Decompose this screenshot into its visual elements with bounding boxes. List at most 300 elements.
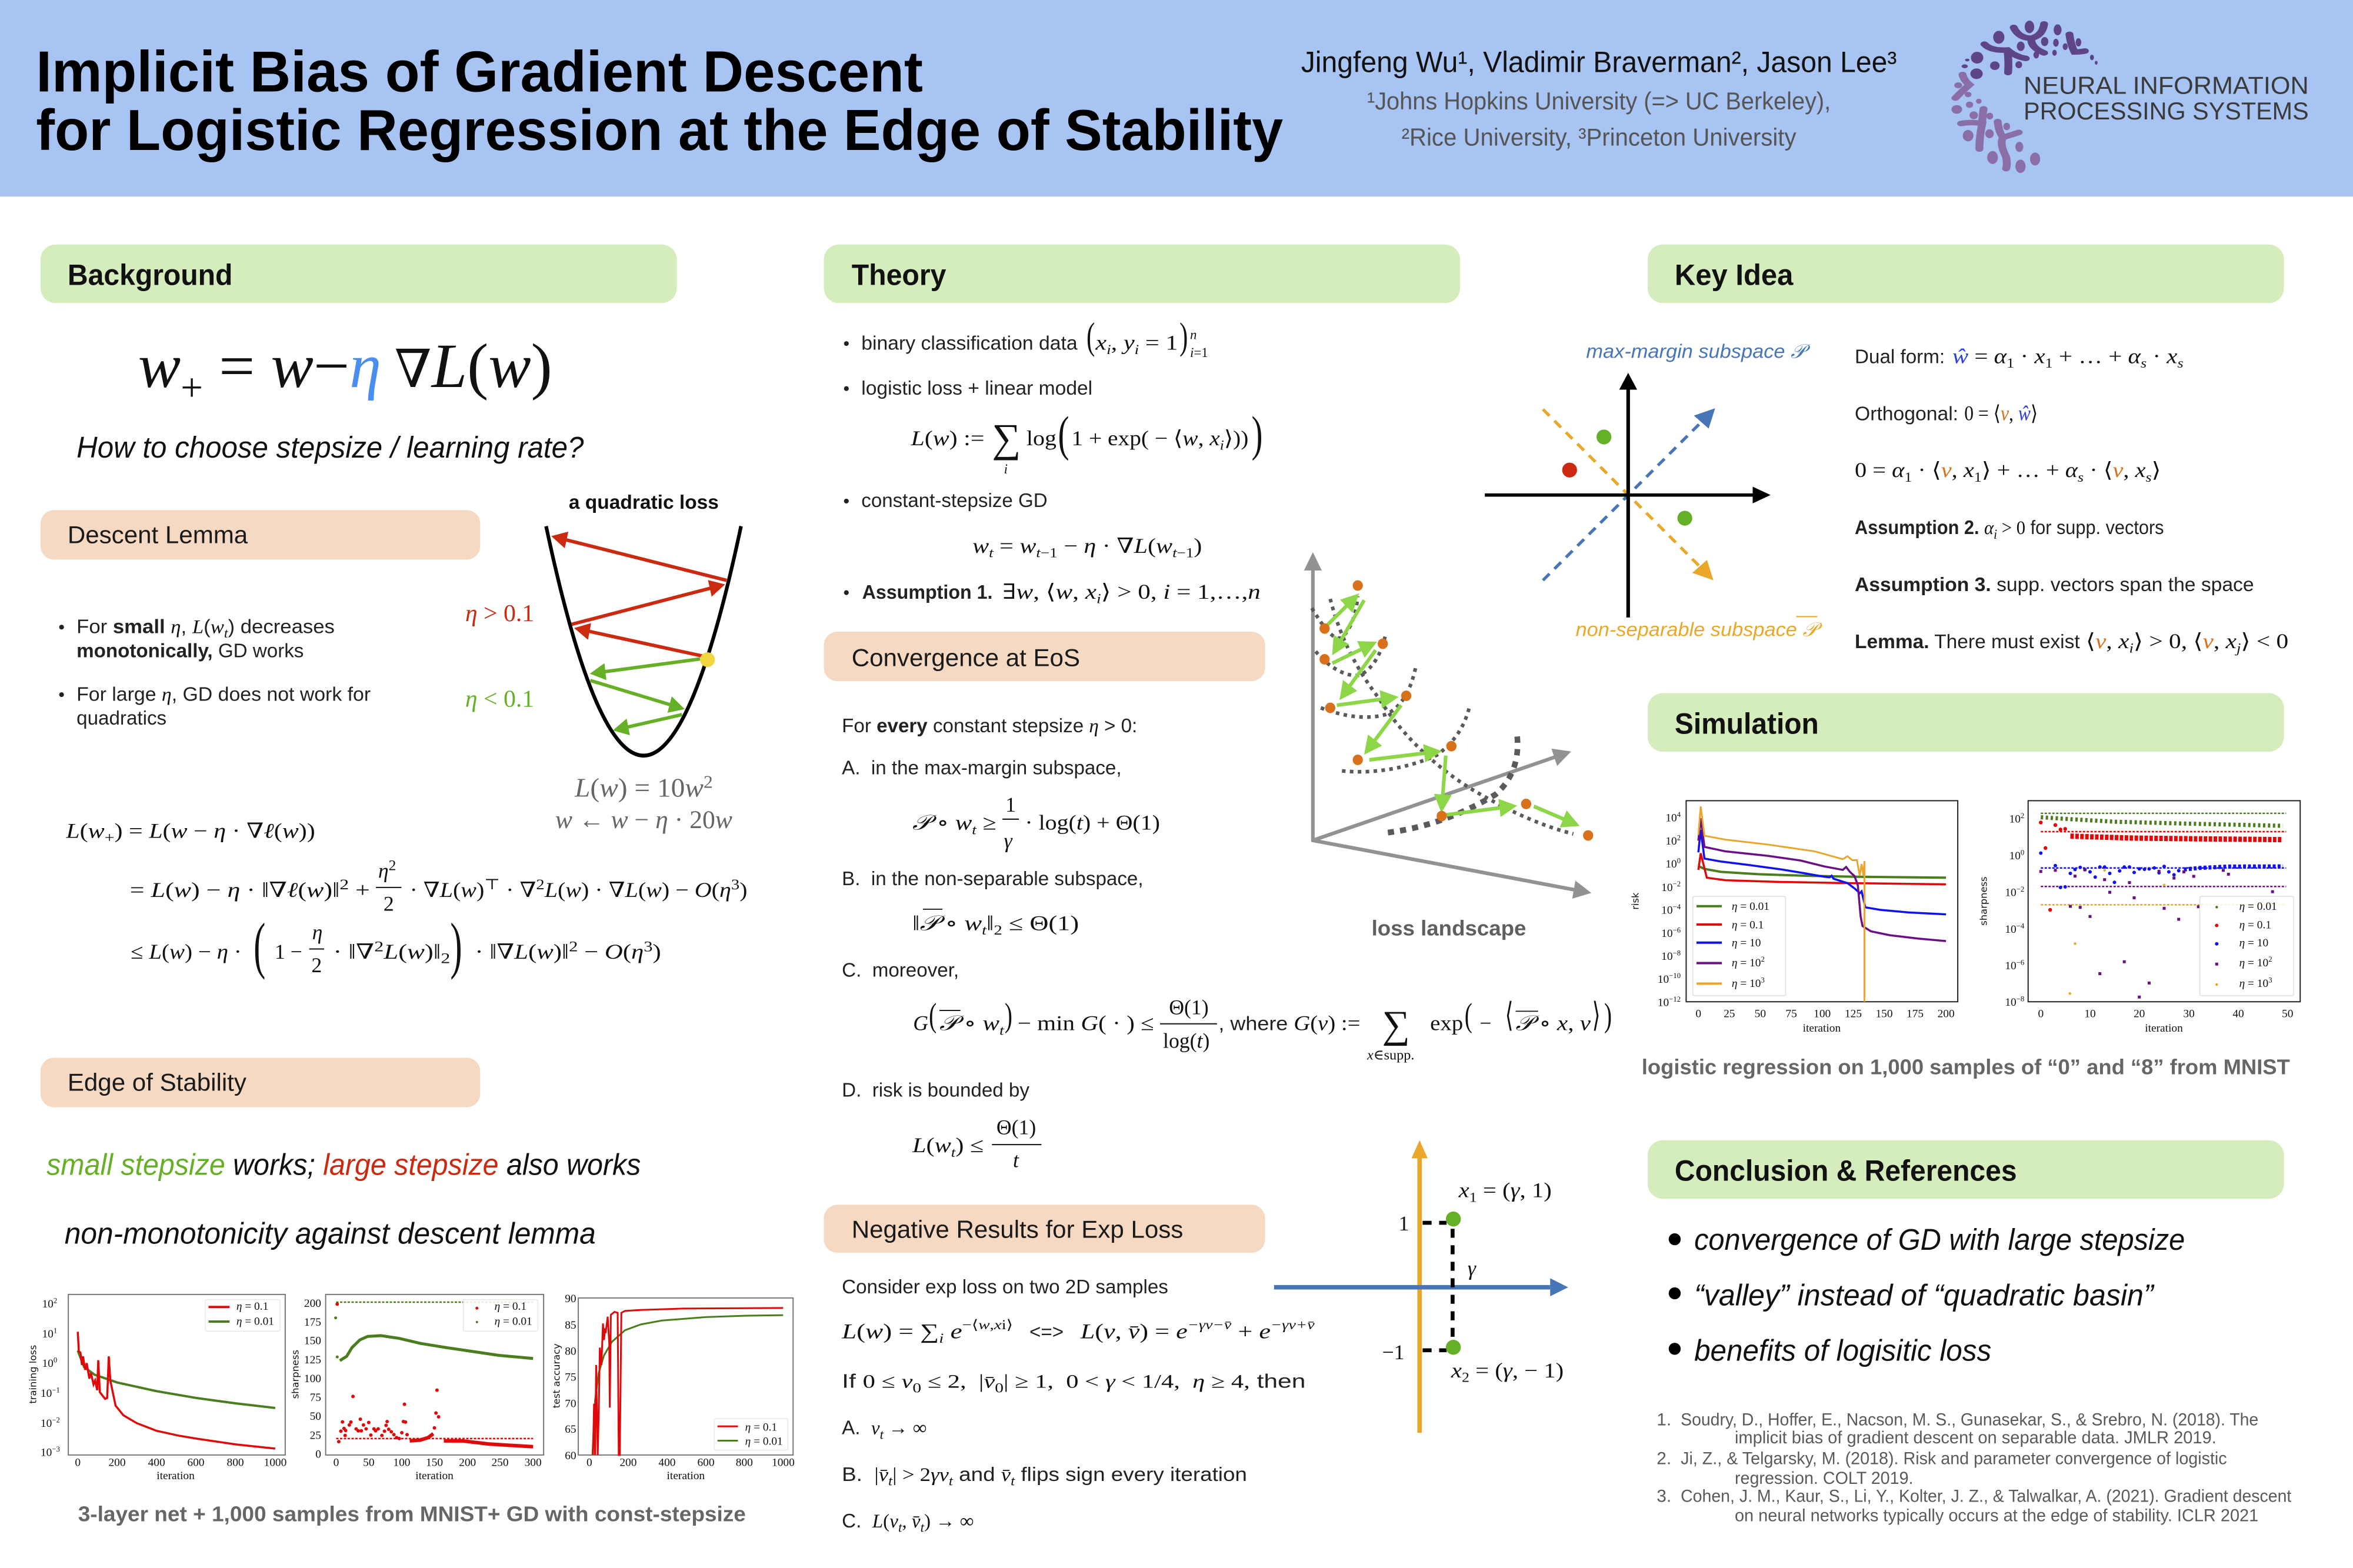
references [1657,1410,2292,1526]
chart: test accuracy: iteration [667,1470,705,1482]
convergence statements: · log( t) + Θ(1) [1025,811,1160,835]
chart: risk: η = 0.1 [1732,919,1764,932]
setup bullets: ⟩ > 0, [1101,580,1163,603]
formula: descent lemma derivation: + [105,829,115,846]
negative results statements: ) → ∞ [924,1510,974,1532]
chart: sharpness: η = 0.01 [495,1315,532,1327]
key idea statements: ⟩ < 0 [2241,629,2288,653]
chart: risk: 0 [1677,857,1681,865]
chart: risk: 175 [1907,1008,1924,1020]
references: 1. [1657,1410,1671,1429]
chart: sharpness sim: sharpness [1978,876,1989,926]
convergence statements: ∑ [1382,1003,1410,1046]
chart: sharpness: 0 [315,1448,321,1460]
chart: training loss: 10 [42,1357,54,1370]
chart: sharpness sim: η = 10 [2239,937,2268,949]
diagram: quadratic loss: L(w) = 10w [575,773,703,803]
formula: descent lemma derivation: + [349,878,370,902]
convergence statements: t [999,1023,1004,1037]
heading: Edge of Stability: Edge of Stability [68,1069,246,1096]
chart: sharpness sim: 10 [2005,886,2017,899]
setup bullets: logistic loss + linear model [861,378,1092,399]
chart: sharpness: 250 [491,1456,509,1469]
chart: test accuracy: test accuracy [551,1343,562,1408]
formula: descent lemma derivation: 2 [374,938,384,955]
references: 3. [1657,1487,1671,1506]
negative results statements: flips sign every iteration [1015,1464,1247,1486]
diagram: subspaces: non-separable subspace 𝒫 [1576,619,1823,641]
chart: training loss: 600 [187,1456,204,1469]
setup bullets: ) [1194,534,1202,558]
chart: risk: 50 [1755,1008,1766,1020]
key idea statements: j [2235,641,2241,656]
heading: Descent Lemma: Descent Lemma [68,521,248,548]
conclusion bullets: benefits of logisitic loss [1694,1334,1991,1367]
chart: test accuracy: 85 [565,1319,576,1332]
chart: training loss: iteration [156,1470,195,1482]
key idea statements: ⟩ + … + [1982,458,2065,482]
title [36,39,1283,162]
chart: training loss [27,1295,286,1482]
formula: descent lemma derivation: O (η [605,940,642,963]
chart: training loss: 200 [108,1456,126,1469]
chart: risk: −2 [1673,880,1681,888]
diagram: exp loss samples: γ, − 1) [1503,1359,1557,1382]
key idea statements: for supp. vectors [2031,517,2175,539]
references: regression. COLT 2019. [1735,1469,1914,1488]
chart: sharpness sim: 10 [2084,1008,2096,1020]
formula: GD update: w−η ∇L(w) [271,332,552,401]
setup bullets: w [972,534,986,558]
setup bullets: n [1190,328,1197,342]
diagram: exp loss samples: −1 [1382,1340,1404,1364]
chart: test accuracy: 0 [586,1456,592,1469]
diagram: quadratic loss: η > 0.1 [465,600,534,626]
chart: sharpness sim: −4 [2017,922,2025,930]
diagram: exp loss samples: 2 [1462,1370,1469,1384]
panel: simulation [1630,693,2300,1079]
chart: sharpness: 150 [426,1456,443,1469]
heading: Convergence at EoS [824,632,1265,681]
formula: descent lemma derivation: 2 [311,953,322,977]
setup bullets: = 1 [1139,331,1178,354]
key idea statements: Assumption 3. supp. vectors span the space [1855,574,2254,596]
negative results statements: A. v [842,1417,880,1439]
chart: sharpness: 175 [304,1316,321,1329]
references: on neural networks typically occurs at the edge of stability. ICLR 2021 [1735,1506,2258,1526]
formula: descent lemma derivation: ) [739,878,747,902]
convergence statements: t [982,923,987,938]
diagram: subspaces [1485,341,1823,641]
setup bullets: − [1058,534,1084,558]
diagram: loss landscape: loss landscape [1372,916,1526,940]
convergence statements: exp [1430,1012,1463,1035]
formula: descent lemma derivation: η [378,859,389,882]
chart: sharpness: 50 [363,1456,375,1469]
chart: training loss: 10 [41,1447,52,1459]
setup bullets [844,315,1263,606]
negative results statements: v̄ [984,1371,995,1393]
chart: sharpness sim: 40 [2232,1008,2244,1020]
key idea statements: ⟩ [2152,458,2161,482]
formula: descent lemma derivation: ) [653,940,661,963]
chart: training loss: η = 0.1 [236,1300,268,1313]
setup bullets: i [1096,591,1101,606]
setup bullets: , [1111,331,1124,354]
negative results statements: −γv−v̄ [1188,1317,1232,1332]
convergence statements: ‖𝒫 ∘ w [912,912,978,935]
negative results statements: ≤ 2, | [921,1371,984,1393]
bullets: descent lemma: t [224,626,228,640]
convergence statements: 𝒫 ∘ w [939,1012,996,1035]
chart: training loss: 400 [148,1456,165,1469]
formula: descent lemma derivation: · ‖∇ L (w )‖ [475,940,566,963]
key idea statements: · [2147,344,2167,368]
chart: risk: 100 [1814,1008,1831,1020]
chart: sharpness sim: 50 [2282,1008,2293,1020]
chart: risk: −6 [1673,926,1681,934]
heading: Key Idea [1648,245,2284,303]
key idea statements: i [1994,527,1997,542]
references: 2. [1657,1449,1671,1469]
affiliations [1367,87,1831,151]
formula: GD update: + [181,366,203,409]
chart: sharpness [290,1295,544,1482]
negative results statements: | ≥ 1, 0 < [1004,1371,1105,1393]
convergence statements: ⟩ [1592,997,1601,1034]
references: Ji, Z., & Telgarsky, M. (2018). Risk and parameter convergence of logistic [1681,1449,2227,1469]
setup bullets: t−1 [1172,546,1191,561]
negative results statements: t [921,1520,925,1535]
negative results statements: | > 2 [892,1464,931,1486]
convergence statements: D. risk is bounded by [842,1080,1029,1102]
chart: risk: 25 [1724,1008,1735,1020]
formula: descent lemma derivation: · ∇ [500,878,536,902]
bullets: descent lemma: For small η, L(w [76,616,224,638]
heading: Background [41,245,677,303]
negative results statements: B. |v̄ [842,1464,887,1486]
heading: Negative Results for Exp Loss: Negative Results for Exp Loss [852,1216,1183,1243]
setup bullets: 1 + exp( − ⟨ w, x [1071,426,1219,450]
chart: sharpness sim: η = 10 [2239,957,2268,969]
key idea statements: Dual form: [1855,346,1945,368]
text: small and large stepsize: small stepsize works; large stepsize also works [46,1147,641,1181]
conclusion bullets: “valley” instead of “quadratic basin” [1694,1278,2155,1312]
formula: descent lemma derivation: ( [254,910,265,980]
chart: sharpness sim: −2 [2017,885,2024,893]
heading: Simulation [1648,693,2284,752]
chart: risk: −10 [1669,972,1681,980]
chart: risk: −8 [1673,949,1681,957]
chart: sharpness: 200 [459,1456,476,1469]
key idea statements: · ⟨ [1912,458,1941,482]
heading: Simulation: Simulation [1675,707,1819,740]
references: Cohen, J. M., Kaur, S., Li, Y., Kolter, J. Z., & Talwalkar, A. (2021). Gradient descent [1681,1487,2292,1506]
convergence statements: t [1013,1149,1019,1172]
chart: risk: η = 10 [1732,957,1761,969]
setup bullets: constant-stepsize GD [861,490,1048,512]
convergence statements: ⟨ [1505,997,1514,1034]
chart: risk: 125 [1845,1008,1862,1020]
chart: sharpness sim: 2 [2021,812,2024,820]
setup bullets: i=1 [1190,345,1208,360]
negative results statements: t [1011,1473,1015,1488]
bullets: descent lemma: quadratics [76,708,166,729]
convergence statements: t [951,1145,956,1160]
bullets: descent lemma: ) decreases [228,616,335,638]
diagram: quadratic loss: 2 [704,772,713,792]
chart: test accuracy: 800 [736,1456,753,1469]
setup bullets: log [1026,426,1056,450]
chart: sharpness sim: 2 [2268,955,2272,963]
heading: Theory: Theory [852,259,946,292]
chart: risk: 10 [1665,858,1677,870]
chart: risk: iteration [1803,1022,1841,1035]
chart: sharpness sim: 10 [2005,996,2017,1009]
convergence statements: ) ≤ [955,1133,984,1157]
key idea statements: · [2014,344,2034,368]
convergence statements [842,715,1612,1172]
panel: theory [824,245,1612,1535]
heading: Conclusion & References [1648,1140,2284,1199]
chart: risk: 10 [1665,835,1677,848]
setup bullets: ) [1179,315,1188,357]
formula: descent lemma derivation: 2 [441,950,450,967]
formula: descent lemma derivation: 3 [644,938,653,955]
key idea statements: α [2128,344,2139,368]
key idea statements: 0 = α [1855,458,1903,482]
formula: descent lemma derivation: 2 [569,938,578,955]
convergence statements: , where G(v) := [1218,1012,1360,1035]
chart: sharpness: 200 [304,1297,321,1310]
diagram: exp loss samples: x [1451,1359,1461,1382]
chart: sharpness: 100 [393,1456,410,1469]
key idea statements: v, x [2203,629,2235,653]
key idea statements: 1 [2007,356,2014,371]
convergence statements: For every constant stepsize η > 0: [842,715,1137,737]
heading: Edge of Stability [41,1057,480,1107]
logo: NeurIPS: NEURAL INFORMATION [2024,72,2309,99]
negative results statements: t [898,1520,902,1535]
key idea statements: x [2167,344,2176,368]
panel: conclusion and references [1648,1140,2292,1526]
chart: training loss: η = 0.01 [236,1315,274,1327]
setup bullets: = [994,534,1019,558]
chart: test accuracy: 70 [565,1397,576,1410]
formula: descent lemma derivation: L(w [66,819,102,843]
panel: background [27,245,795,1526]
chart: sharpness sim: η = 0.01 [2239,900,2277,913]
convergence statements: ) [1005,996,1012,1034]
negative results statements: If 0 ≤ v [842,1371,910,1393]
chart: sharpness sim: η = 10 [2239,978,2268,990]
formula: descent lemma derivation: 2 [339,876,349,893]
chart: sharpness sim: η = 0.1 [2239,919,2271,932]
chart: sharpness sim: 10 [2009,813,2021,826]
chart: test accuracy: 80 [565,1346,576,1358]
caption: simulation charts: logistic regression on 1,000 samples of “0” and “8” from MNIST [1642,1055,2290,1079]
caption: EoS charts: 3-layer net + 1,000 samples from MNIST+ GD with const-stepsize [78,1502,746,1526]
formula: descent lemma derivation: = L (w ) − η · ‖∇ ℓ(w )‖ [130,878,336,902]
title: Implicit Bias of Gradient Descent [36,39,923,104]
chart: training loss: 10 [42,1328,54,1340]
diagram: exp loss samples: 1 [1469,1190,1477,1205]
setup bullets: x [1095,331,1105,354]
chart: test accuracy: 400 [658,1456,675,1469]
convergence statements: − min G ( · ) ≤ [1018,1012,1154,1035]
convergence statements: ) [1604,996,1612,1034]
setup bullets: ∑ [992,416,1021,461]
setup bullets: i [1220,438,1224,453]
convergence statements: ( [929,996,936,1034]
key idea statements: 1 [1904,470,1912,485]
formula: descent lemma derivation [65,819,747,980]
chart: risk: η = 10 [1732,937,1761,949]
convergence statements: log(t) [1163,1029,1209,1053]
references: Soudry, D., Hoffer, E., Nacson, M. S., Gunasekar, S., & Srebro, N. (2018). The [1681,1410,2258,1429]
convergence statements: t [972,822,977,837]
chart: training loss: 1 [54,1327,57,1335]
negative results statements: → ∞ [884,1417,926,1439]
chart: test accuracy: η = 0.01 [745,1436,783,1448]
diagram: exp loss samples: = ( [1477,1179,1511,1202]
chart: risk: 10 [1665,812,1677,825]
formula: descent lemma derivation: ) = [115,819,149,843]
text: non-monotonicity: non-monotonicity against descent lemma [65,1217,596,1250]
logo: NeurIPS: PROCESSING SYSTEMS [2024,98,2309,125]
setup bullets: i = 1,…, n [1163,580,1258,603]
chart: sharpness: 0 [334,1456,339,1469]
setup bullets: η · ∇ L (w [1084,534,1170,558]
key idea statements: + … + [2053,344,2128,368]
key idea statements: ⟨v, x [2086,629,2128,653]
diagram: quadratic loss: η < 0.1 [465,685,534,712]
chart: training loss: training loss [27,1345,38,1404]
negative results statements: v̄ [912,1510,921,1532]
convergence statements: 𝒫 ∘ x, v [1516,1012,1591,1035]
key idea statements: s [2146,470,2152,485]
chart: test accuracy: 75 [565,1371,576,1383]
setup bullets: i [1004,462,1008,476]
convergence statements: Θ(1) [1169,995,1209,1019]
chart: training loss: −1 [52,1386,60,1394]
setup bullets: t [989,546,994,561]
setup bullets: t−1 [1036,546,1055,561]
chart: risk: −12 [1669,995,1681,1003]
negative results statements: and [953,1464,1001,1486]
chart: training loss: −2 [52,1416,60,1424]
formula: descent lemma derivation: ≤ L(w) − η · [131,940,242,963]
chart: sharpness sim: 3 [2268,976,2272,984]
chart: training loss: −3 [52,1445,60,1453]
key idea statements: i [2129,641,2134,656]
diagram: exp loss samples: γ [1468,1256,1477,1280]
setup bullets: ∃ w , ⟨ w , x [1002,580,1095,603]
diagram: exp loss samples: γ, 1) [1511,1179,1548,1202]
diagram: exp loss samples: x [1459,1179,1468,1202]
formula: GD update: = [203,332,271,401]
chart: risk [1630,800,1958,1035]
diagram: quadratic loss: w ← w − η · 20w [555,806,732,834]
heading: Conclusion & References: Conclusion & References [1675,1155,2017,1187]
convergence statements: − [1479,1012,1491,1035]
key idea statements: Lemma. There must exist [1855,631,2080,653]
negative results statements: C. L(v [842,1510,898,1532]
heading: Theory [824,245,1460,303]
diagram: loss landscape [1312,559,1593,940]
chart: training loss: 0 [54,1356,57,1364]
negative results statements: γv [931,1464,949,1486]
key idea statements: α [2065,458,2077,482]
negative results statements: t [880,1427,884,1442]
negative results statements: e [944,1319,962,1343]
setup bullets: i [1106,342,1111,357]
convergence statements: x∈supp. [1367,1047,1414,1063]
convergence statements: ≤ Θ(1) [1002,912,1079,935]
negative results statements: , [902,1510,912,1532]
convergence statements: G [913,1012,928,1035]
key idea statements: v, x [1941,458,1973,482]
key idea statements: ⟩ > 0, ⟨ [2134,629,2203,653]
negative results statements: <=> [1029,1321,1064,1343]
chart: risk: 75 [1785,1008,1797,1020]
formula: descent lemma derivation: 2 [389,857,396,874]
setup bullets: ( [1086,315,1095,357]
chart: test accuracy: 60 [565,1450,576,1462]
key idea statements: s [2177,356,2184,371]
chart: sharpness: 100 [304,1373,321,1385]
setup bullets: L(w ) := [910,426,984,450]
diagram: exp loss samples: = ( [1469,1359,1503,1382]
chart: test accuracy: 65 [565,1423,576,1436]
chart: risk: 10 [1658,996,1669,1009]
chart: risk: 3 [1761,976,1765,984]
convergence statements: L (w [912,1133,948,1157]
formula: descent lemma derivation: (w )‖ [398,940,438,963]
chart: test accuracy: 200 [619,1456,636,1469]
chart: risk: 2 [1761,955,1765,963]
formula: descent lemma derivation: 3 [731,876,739,893]
chart: training loss: 1000 [264,1456,286,1469]
chart: sharpness sim: 10 [2009,850,2021,862]
diagram: subspaces: max-margin subspace 𝒫 [1586,341,1811,362]
key idea statements: v, x [2112,458,2144,482]
key idea statements: Assumption 2. α [1855,517,1994,539]
question text: How to choose stepsize / learning rate? [76,431,584,464]
diagram: quadratic loss: a quadratic loss [569,492,719,513]
chart: training loss: 2 [54,1297,57,1305]
convergence statements: 2 [994,923,1002,938]
heading: Negative Results for Exp Loss [824,1205,1265,1253]
heading: Descent Lemma [41,510,480,560]
negative results statements [841,1276,1315,1535]
negative results statements: i [939,1331,944,1346]
formula: descent lemma derivation: − [578,940,605,963]
setup bullets: ( [1058,406,1069,461]
chart: sharpness sim: 10 [2005,960,2017,972]
key idea statements: > 0 [1997,517,2025,539]
chart: sharpness sim: 0 [2021,848,2024,856]
chart: test accuracy [551,1293,795,1482]
convergence statements: C. moreover, [842,960,959,982]
negative results statements: −⟨ w ,x i⟩ [962,1317,1011,1332]
negative results statements: e [1259,1319,1268,1343]
negative results statements: t [888,1473,893,1488]
convergence statements: ≥ [976,811,996,835]
negative results statements: 0 [995,1380,1004,1395]
chart: test accuracy: 1000 [772,1456,795,1469]
chart: sharpness: 150 [304,1335,321,1347]
